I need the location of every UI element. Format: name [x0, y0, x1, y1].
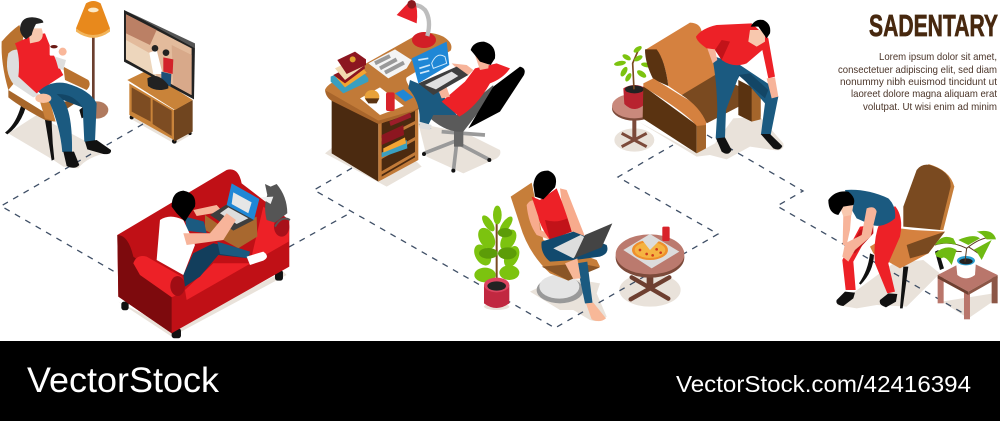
- lounge chair: [511, 183, 600, 303]
- desk body: [325, 33, 451, 182]
- office chair: [422, 67, 525, 173]
- laptop: [210, 183, 259, 231]
- scene: person bent over in chair: [828, 164, 998, 319]
- book stack: [331, 52, 368, 93]
- armchair: [2, 25, 90, 161]
- footer url: VectorStock.com/42416394: [676, 371, 971, 397]
- cat: [261, 184, 287, 223]
- sofa: [117, 169, 290, 338]
- tv screen: [124, 10, 195, 99]
- scene: woman on red sofa with laptop and cat: [117, 169, 290, 338]
- bent person: [828, 190, 901, 307]
- woman arm: [183, 213, 236, 245]
- man seated: [7, 17, 111, 168]
- scene: man at desk: [325, 0, 525, 182]
- desk laptop: [412, 42, 468, 95]
- armchair: [643, 23, 761, 153]
- side table with plant: [935, 231, 998, 319]
- tv cabinet: [127, 71, 193, 144]
- pizza table: [616, 227, 684, 299]
- footer logo: VectorStock: [27, 361, 220, 400]
- paper, burger, can and phone: [360, 87, 413, 115]
- open book: [368, 49, 412, 78]
- dashed connector lines: [1, 124, 963, 328]
- man standing up: [696, 20, 782, 154]
- body text: [838, 51, 997, 113]
- woman on sofa: [157, 191, 267, 287]
- desk lamp: [397, 0, 436, 48]
- side table with plant: [612, 45, 657, 147]
- laptop cushion: [205, 215, 257, 248]
- man at laptop: [408, 42, 510, 130]
- scene: woman in lounge chair with pizza: [471, 171, 684, 321]
- chair: [859, 164, 954, 308]
- books on shelf: [382, 113, 411, 157]
- potted plant: [471, 206, 522, 308]
- floor shadows: [8, 115, 995, 337]
- scene: man rising from armchair: [612, 20, 782, 154]
- scene: man in armchair watching tv: [2, 1, 195, 168]
- footer bar: [0, 341, 1000, 421]
- floor lamp: [76, 1, 110, 119]
- woman with laptop: [527, 171, 612, 321]
